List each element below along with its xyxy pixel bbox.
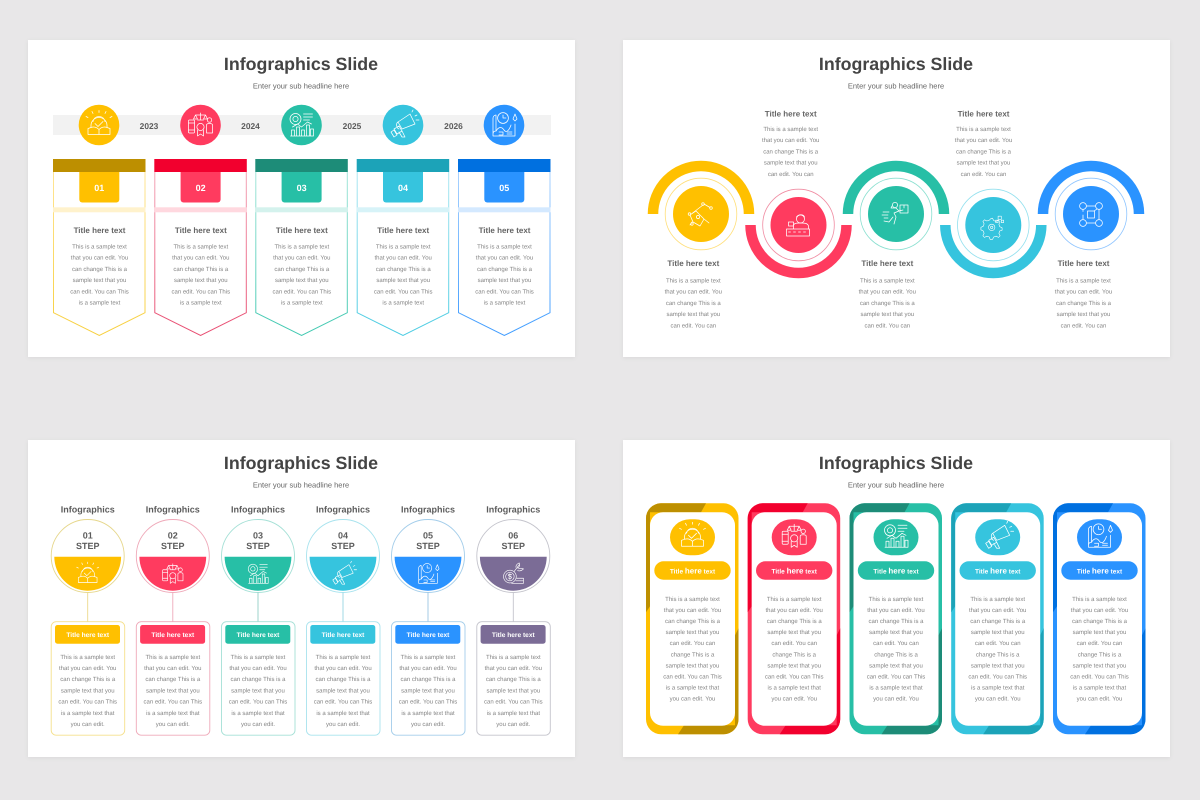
card 04: that you can edit. You [375,255,432,262]
icon: open book [79,105,119,145]
column card 2: This is a sample text [767,596,822,603]
card 01: This is a sample text [72,244,127,250]
step column 06: 06 [508,530,518,540]
step column 01: STEP [76,541,99,551]
step 1 text: can change This is a [666,300,721,307]
card 03: can change This is a [274,266,330,273]
step column 03: Title here text [237,632,280,639]
column card 3: sample text that you [869,662,923,669]
column card 1 [646,503,738,734]
column card 4: is a sample text that [971,685,1025,692]
step 3 text: that you can edit. You [859,289,916,296]
column card 2: sample text that you [767,629,821,636]
card 04 [357,159,449,336]
step column 06: Title here text [492,632,535,639]
icon: plan [484,105,524,145]
card 04: Title here text [377,226,429,235]
column card 4: can edit. You can [975,640,1021,647]
step 4 text: can change This is a [956,148,1012,155]
step column 03: is a sample text that [231,710,285,717]
step column 03: can edit. You can This [229,699,287,706]
step 3 text: can change This is a [860,300,915,307]
column card 2: you can edit. You [771,696,817,703]
title: Infographics Slide [224,453,378,473]
card 04: 04 [398,183,408,193]
column card 3: is a sample text that [869,685,923,692]
card 04: can edit. You can This [374,288,433,295]
card 01: can change This is a [72,266,128,273]
step column 04: can edit. You can This [314,699,372,706]
step column 01: 01 [83,530,93,540]
step column 03: can change This is a [231,676,286,683]
step column 01: Infographics [61,504,115,514]
column card 4: sample text that you [971,629,1025,636]
step column 05: sample text that you [401,687,455,694]
step column 04 [306,504,380,735]
card 04: can change This is a [376,266,431,273]
step column 05: can edit. You can This [399,699,457,706]
card 02: can edit. You can This [171,288,230,295]
card 03: This is a sample text [274,244,329,250]
column card 1: This is a sample text [665,596,720,603]
step column 05: is a sample text that [401,710,455,717]
step column 04: you can edit. [326,721,360,728]
year 2026: 2026 [444,121,463,131]
step column 03: that you can edit. You [229,665,287,672]
step 2 arc and icon [750,189,846,273]
step column 03: STEP [246,541,270,551]
column card 2: change This is a [772,651,817,658]
step column 06: you can edit. [496,721,531,728]
step column 06: can edit. You can This [484,699,543,706]
step 5 text: Title here text [1058,259,1110,268]
step column 02: This is a sample text [145,654,200,661]
step 5 arc and icon [1043,166,1139,250]
step 5 text: that you can edit. You [1055,289,1112,296]
step column 04: is a sample text that [316,710,370,717]
step column 04: can change This is a [316,676,371,683]
step 1 text: can edit. You can [670,322,716,329]
step column 06 [477,504,550,735]
step column 04: sample text that you [316,687,370,694]
step column 01: Title here text [66,632,110,639]
step 3 text: sample text that you [860,311,914,318]
step 5 text [1055,259,1112,329]
icon: scale [180,105,221,145]
year 2025: 2025 [343,121,362,131]
step 3 arc and icon [848,166,944,250]
step 3 text: Title here text [861,259,914,268]
column card 4: change This is a [976,651,1020,658]
step column 02: that you can edit. You [144,665,201,672]
step 1 text: sample text that you [666,311,720,318]
card 02: sample text that you [174,277,228,284]
step 2 text: can change This is a [763,148,819,155]
card 02: This is a sample text [173,244,228,250]
step 2 text: that you can edit. You [762,137,819,144]
step 4 text: can edit. You can [961,171,1006,178]
step column 05: Title here text [407,632,450,639]
card 01: that you can edit. You [71,255,128,262]
card 03: that you can edit. You [273,255,330,262]
timeline bar [53,115,551,135]
card 03: 03 [297,183,307,193]
column card 5: is a sample text that [1073,685,1127,692]
step 2 text [762,110,819,178]
panel: rounded column cards [623,440,1170,757]
step column 02: sample text that you [146,687,200,694]
step column 05: 05 [423,530,433,540]
step column 06: This is a sample text [486,654,541,661]
column card 5: can edit. You can This [1070,673,1129,680]
step column 01: you can edit. [71,721,105,728]
step 1 arc and icon [653,166,749,250]
card 05: Title here text [479,226,531,235]
card 02 [154,159,247,336]
panel: timeline chevron cards [28,40,575,357]
card 04: This is a sample text [376,244,431,250]
column card 3: This is a sample text [869,596,924,603]
column card 3: change This is a [874,651,918,658]
column card 4: Title here text [975,566,1021,575]
step column 03: Infographics [231,504,285,514]
step column 05: This is a sample text [401,654,456,661]
step column 04: This is a sample text [316,654,371,661]
step 4 text: This is a sample text [956,126,1011,133]
step 4 text [955,110,1012,178]
column card 5: that you can edit. You [1071,607,1128,614]
card 05: This is a sample text [477,244,532,250]
step column 02: Infographics [146,504,200,514]
card 03: is a sample text [281,300,323,306]
column card 5: you can edit. You [1077,696,1122,703]
step column 05: can change This is a [401,676,456,683]
column card 1: can edit. You can This [663,673,722,680]
card 05: is a sample text [484,300,526,306]
step column 03 [222,504,295,735]
title: Infographics Slide [819,453,973,473]
subtitle: Enter your sub headline here [848,82,944,90]
step column 02 [136,504,210,735]
step 2 text: Title here text [765,110,817,118]
card 02: is a sample text [180,300,222,306]
step column 04: STEP [331,541,355,551]
step 5 text: can change This is a [1056,300,1112,307]
column card 2: that you can edit. You [766,607,823,614]
subtitle: Enter your sub headline here [848,480,944,490]
step 4 text: that you can edit. You [955,137,1012,144]
card 01 [53,159,146,336]
step column 01 [51,504,125,735]
card 01: 01 [94,183,104,193]
step column 01: can change This is a [60,676,116,683]
card 05: can edit. You can This [475,288,534,295]
step 2 text: can edit. You can [768,171,814,178]
column card 4 [951,503,1044,734]
step column 05: STEP [416,541,440,551]
panel: wave of arcs [623,40,1170,357]
card 05: sample text that you [478,277,531,284]
column card 2 [748,503,840,734]
step column 02: can change This is a [145,676,201,683]
step column 01: can edit. You can This [58,699,117,706]
column card 2: is a sample text that [768,685,821,692]
column card 1: can change This is a [665,618,721,625]
step column 05: that you can edit. You [399,665,457,672]
step 3 text [859,259,916,329]
title: Infographics Slide [819,54,973,74]
step 5 text: can edit. You can [1061,322,1106,329]
panel: six steps [28,440,575,757]
column card 5: This is a sample text [1072,596,1127,603]
column card 4: This is a sample text [970,596,1025,603]
step column 03: 03 [253,530,263,540]
icon: megaphone [383,105,423,145]
step column 04: Infographics [316,504,370,514]
step column 05 [392,504,465,735]
step column 05: you can edit. [411,721,445,728]
column card 3: sample text that you [869,629,923,636]
column card 4: that you can edit. You [969,607,1026,614]
step column 06: can change This is a [486,676,541,683]
step column 03: you can edit. [241,721,275,728]
step column 06: that you can edit. You [485,665,542,672]
card 02: Title here text [175,226,227,235]
column card 1: sample text that you [666,629,719,636]
step column 02: Title here text [151,632,195,639]
column card 5: can change This is a [1072,618,1128,625]
step 1 text: Title here text [667,259,720,268]
step column 04: that you can edit. You [314,665,372,672]
step column 02: you can edit. [156,721,190,728]
column card 1: can edit. You can [670,640,715,647]
step column 01: This is a sample text [60,654,115,661]
column card 2: can edit. You can This [765,673,824,680]
step 5 text: This is a sample text [1056,278,1111,284]
year 2024: 2024 [241,121,260,131]
step column 06: STEP [502,541,525,551]
column card 1: sample text that you [666,662,719,669]
step column 06: is a sample text that [487,710,540,717]
step column 03: sample text that you [231,687,285,694]
column card 1: you can edit. You [670,696,715,703]
column card 3: you can edit. You [873,696,919,703]
step column 01: sample text that you [61,687,115,694]
step column 02: can edit. You can This [143,699,202,706]
card 02: that you can edit. You [172,255,229,262]
step column 01: that you can edit. You [59,665,116,672]
column card 5: Title here text [1077,566,1123,575]
card 05: can change This is a [477,266,533,273]
step 2 text: This is a sample text [763,126,818,133]
card 05: that you can edit. You [476,255,533,262]
card 01: can edit. You can This [70,288,129,295]
column card 2: can change This is a [767,618,822,625]
step column 05: Infographics [401,504,455,514]
step 1 text [665,259,722,329]
step 1 text: This is a sample text [666,278,721,284]
year 2023: 2023 [140,121,159,131]
column card 5: change This is a [1078,651,1122,658]
card 02: can change This is a [173,266,229,273]
card 04: is a sample text [382,300,424,306]
card 04: sample text that you [376,277,430,284]
column card 3 [850,503,942,734]
step 5 text: sample text that you [1057,311,1110,318]
column card 2: sample text that you [767,662,821,669]
column card 1: is a sample text that [666,685,720,692]
step column 06: sample text that you [486,687,540,694]
column card 4: sample text that you [971,662,1025,669]
column card 1: that you can edit. You [664,607,721,614]
step column 03: This is a sample text [231,654,286,661]
step column 02: 02 [168,530,178,540]
step column 06: Infographics [486,504,540,514]
column card 5: sample text that you [1073,629,1126,636]
card 05: 05 [499,183,509,193]
column card 2: Title here text [772,566,818,575]
column card 5 [1053,503,1146,734]
column card 2: can edit. You can [771,640,817,647]
column card 3: can edit. You can [873,640,919,647]
icon: chart [281,105,322,145]
card 02: 02 [196,183,206,193]
column card 3: can edit. You can This [867,673,925,680]
card 01: is a sample text [79,300,121,306]
subtitle: Enter your sub headline here [253,480,349,490]
card 01: sample text that you [73,277,126,284]
column card 5: sample text that you [1073,662,1126,669]
column card 3: Title here text [873,566,919,575]
card 03: can edit. You can This [272,288,331,295]
step 3 text: can edit. You can [864,322,910,329]
card 03: sample text that you [275,277,329,284]
subtitle: Enter your sub headline here [253,82,349,90]
column card 5: can edit. You can [1077,640,1122,647]
column card 1: change This is a [671,651,715,658]
card 03 [255,159,348,336]
column card 4: can edit. You can This [968,673,1027,680]
step 3 text: This is a sample text [860,278,915,284]
step 4 arc and icon [945,189,1041,273]
step 4 text: Title here text [958,110,1010,118]
column card 4: can change This is a [970,618,1026,625]
card 03: Title here text [276,226,328,235]
step column 04: Title here text [322,632,365,639]
card 05 [458,159,550,336]
card 01: Title here text [74,226,126,235]
step column 01: is a sample text that [61,710,115,717]
title: Infographics Slide [224,54,378,74]
column card 3: can change This is a [869,618,924,625]
column card 1: Title here text [670,566,716,575]
column card 4: you can edit. You [975,696,1021,703]
step column 04: 04 [338,530,348,540]
step 1 text: that you can edit. You [665,289,722,296]
column card 3: that you can edit. You [867,607,925,614]
step column 02: is a sample text that [146,710,200,717]
step column 02: STEP [161,541,185,551]
step 4 text: sample text that you [957,160,1010,167]
step 2 text: sample text that you [764,160,818,167]
